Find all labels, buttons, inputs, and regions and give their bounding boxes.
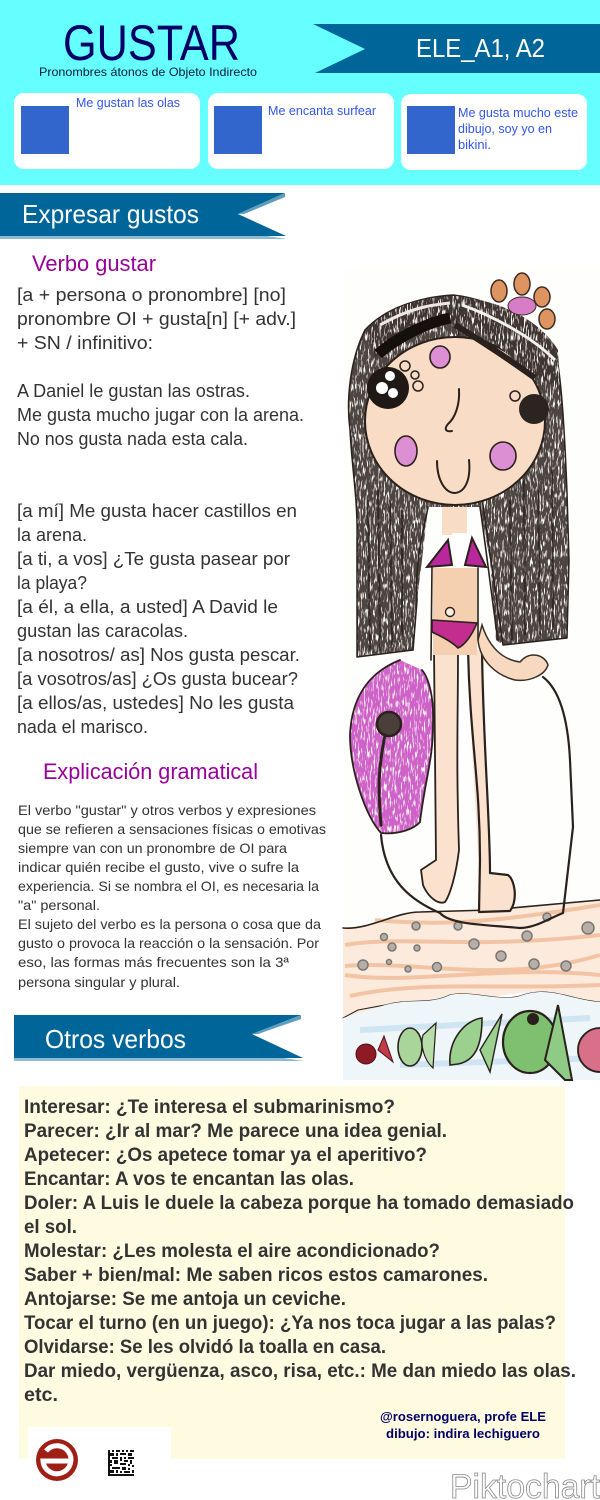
text block: formula and examples: pronombre OI + gusta[n] [+ adv.]: [17, 309, 296, 329]
panel: other verbs: el sol.: [24, 1217, 77, 1238]
nose and mouth: [437, 389, 469, 493]
icon: data matrix code: [108, 1450, 134, 1476]
section ribbon: Expresar gustos: Expresar gustos: [22, 199, 199, 229]
text block: conjugation: [a vosotros/as] ¿Os gusta bucear?: [17, 669, 298, 689]
text block: formula and examples: A Daniel le gustan las ostras.: [17, 381, 250, 401]
title: GUSTAR: [63, 15, 240, 71]
panel: other verbs: Apetecer: ¿Os apetece tomar ya el aperitivo?: [24, 1145, 427, 1166]
text block: grammar explanation: siempre van con un pronombre de OI para: [18, 840, 287, 856]
example card 3: dibujo, soy yo en: [458, 121, 552, 136]
flower: [491, 273, 555, 329]
section ribbon: Otros verbos: Otros verbos: [45, 1024, 186, 1054]
subtitle: Pronombres átonos de Objeto Indirecto: [39, 65, 257, 79]
panel: other verbs: etc.: [24, 1385, 58, 1406]
header band: [0, 0, 600, 185]
sand: [343, 900, 600, 1018]
panel: other verbs: Parecer: ¿Ir al mar? Me parece una idea genial.: [24, 1121, 447, 1142]
level ribbon: ELE_A1, A2: [416, 33, 545, 63]
torso: [433, 568, 477, 655]
text block: grammar explanation: eso, las formas más frecuentes son la 3ª: [18, 954, 290, 970]
text block: grammar explanation: El sujeto del verbo es la persona o cosa que da: [18, 916, 321, 932]
hair back: [349, 295, 569, 657]
bikini: [427, 533, 486, 648]
credits: dibujo: indira lechiguero: [386, 1426, 540, 1441]
credits: @rosernoguera, profe ELE: [380, 1409, 546, 1424]
panel: other verbs: Dar miedo, vergüenza, asco, risa, etc.: Me dan miedo las olas.: [24, 1361, 576, 1382]
panel: other verbs: Doler: A Luis le duele la cabeza porque ha tomado demasiado: [24, 1193, 574, 1214]
text block: formula and examples: No nos gusta nada esta cala.: [17, 429, 248, 449]
example card 3: [401, 94, 587, 170]
text block: formula and examples: + SN / infinitivo:: [17, 333, 153, 353]
legs and feet: [421, 650, 515, 912]
section ribbon: Expresar gustos: [0, 193, 287, 239]
text block: grammar explanation: "a" personal.: [18, 897, 100, 913]
fringe: [368, 296, 560, 390]
text block: conjugation: [a ellos/as, ustedes] No les gusta: [17, 693, 295, 713]
forehead jewel and cheeks: [395, 346, 516, 470]
panel: other verbs: Molestar: ¿Les molesta el aire acondicionado?: [24, 1241, 440, 1262]
text block: grammar explanation: [18, 802, 326, 990]
panel: other verbs: Olvidarse: Se les olvidó la toalla en casa.: [24, 1337, 386, 1358]
eyes: [367, 361, 549, 424]
heading: Explicación gramatical: Explicación gramatical: [43, 759, 258, 784]
panel: other verbs: Tocar el turno (en un juego): ¿Ya nos toca jugar a las palas?: [24, 1313, 556, 1334]
illustration: child's drawing of girl in bikini on the beach: [343, 268, 600, 1080]
text block: formula and examples: Me gusta mucho jugar con la arena.: [17, 405, 304, 425]
text block: conjugation: gustan las caracolas.: [17, 621, 188, 641]
example card 2: [208, 93, 394, 169]
panel: other verbs: Antojarse: Se me antoja un ceviche.: [24, 1289, 346, 1310]
surfboard outline: [381, 677, 573, 928]
water and fish: [343, 992, 600, 1080]
neck: [442, 507, 467, 535]
text block: conjugation: [a mí] Me gusta hacer castillos en: [17, 501, 297, 521]
credits: [380, 1409, 546, 1441]
licence and code box: [28, 1427, 171, 1500]
example card 1: Me gustan las olas: [76, 95, 180, 110]
text block: grammar explanation: indicar quién recibe el gusto, vive o sufre la: [18, 859, 299, 875]
text block: formula and examples: [17, 285, 304, 449]
text block: conjugation: [a nosotros/ as] Nos gusta pescar.: [17, 645, 300, 665]
arm and hand: [413, 507, 548, 680]
level ribbon: [313, 24, 600, 73]
text block: conjugation: [a él, a ella, a usted] A David le: [17, 597, 278, 617]
section ribbon: Otros verbos: [14, 1015, 304, 1061]
text block: grammar explanation: que se refieren a sensaciones físicas o emotivas: [18, 821, 326, 837]
example card 3: Me gusta mucho este: [458, 105, 578, 120]
example card 3: bikini.: [458, 137, 491, 152]
panel: other verbs: Encantar: A vos te encantan las olas.: [24, 1169, 354, 1190]
text block: grammar explanation: experiencia. Si se nombra el OI, es necesaria la: [18, 878, 319, 894]
panel: other verbs: Interesar: ¿Te interesa el submarinismo?: [24, 1097, 395, 1118]
text block: conjugation: nada el marisco.: [17, 717, 148, 737]
icon: licence logo: [36, 1439, 78, 1481]
text block: conjugation: la arena.: [17, 525, 87, 545]
text block: conjugation: [a ti, a vos] ¿Te gusta pasear por: [17, 549, 290, 569]
example card 1: [14, 93, 200, 169]
panel: other verbs: Saber + bien/mal: Me saben ricos estos camarones.: [24, 1265, 488, 1286]
heading: Verbo gustar: Verbo gustar: [32, 251, 156, 276]
face: [365, 337, 545, 505]
text block: grammar explanation: persona singular y plural.: [18, 974, 180, 990]
panel: other verbs: [19, 1086, 576, 1459]
text block: conjugation: la playa?: [17, 573, 87, 593]
text block: formula and examples: [a + persona o pronombre] [no]: [17, 285, 286, 305]
text block: conjugation: [17, 501, 300, 737]
text block: grammar explanation: El verbo "gustar" y otros verbos y expresiones: [18, 802, 316, 818]
text block: grammar explanation: gusto o provoca la reacción o la sensación. Por: [18, 935, 319, 951]
example card 2: Me encanta surfear: [268, 103, 377, 118]
purple shell / flipper: [350, 660, 433, 833]
